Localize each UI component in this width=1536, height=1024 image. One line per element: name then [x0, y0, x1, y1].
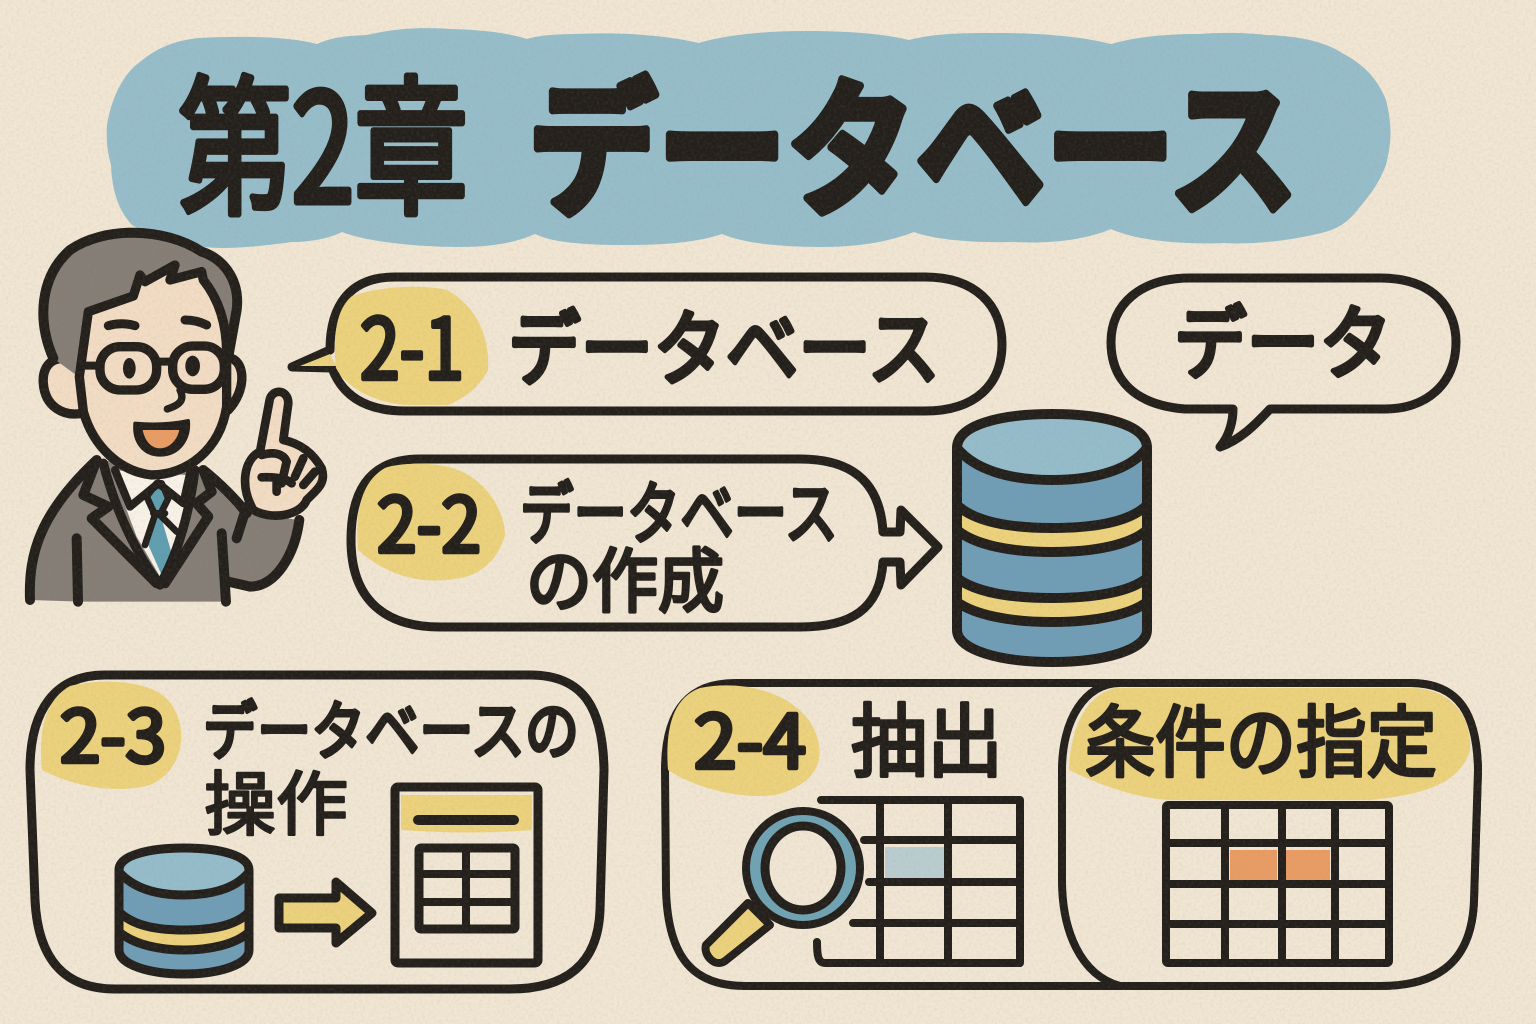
- title banner: [107, 28, 1391, 248]
- badge 2-2: [357, 464, 505, 581]
- arrow: [279, 882, 372, 943]
- mouth: [135, 421, 188, 455]
- label 2-2 text line 1: データベース: [520, 459, 838, 558]
- title: chapter number: 第2章: [178, 29, 468, 246]
- badge 2-1: [335, 287, 488, 405]
- section 2-2 bubble with arrow: [351, 459, 938, 627]
- ears: [43, 357, 242, 414]
- label 2-4 number: 2-4: [694, 683, 806, 790]
- badge 2-4: [667, 685, 820, 796]
- shirt and tie: [103, 463, 195, 585]
- jacket outlines and lapels: [30, 460, 299, 602]
- title: database: データベース: [528, 31, 1298, 246]
- icon: data table: [817, 800, 1020, 963]
- label 2-1 number: 2-1: [360, 283, 464, 404]
- label 2-1 text: データベース: [508, 283, 940, 402]
- character: presenter pointing up: [30, 233, 323, 602]
- speech bubble: data: [1111, 278, 1456, 447]
- jacket: [30, 460, 299, 602]
- nose: [167, 390, 182, 409]
- icon: table with highlighted cells: [1166, 805, 1389, 963]
- label: extraction: 抽出: [851, 678, 1003, 794]
- label 2-2 text line 2: の作成: [526, 526, 724, 627]
- label: condition: 条件の指定: [1085, 681, 1437, 793]
- brows: [108, 320, 207, 326]
- eyes: [123, 356, 200, 379]
- label 2-3 number: 2-3: [60, 678, 166, 783]
- label 2-2 number: 2-2: [377, 464, 481, 574]
- bubble text: データ: [1174, 280, 1392, 396]
- icon: document with table: [395, 787, 538, 963]
- label 2-3 text line 1: データベースの: [203, 681, 579, 773]
- hair outline: [43, 233, 237, 358]
- icon: magnifying glass: [706, 811, 860, 963]
- highlight header: [1069, 688, 1470, 800]
- label 2-3 text line 2: 操作: [204, 749, 348, 850]
- badge 2-3: [41, 682, 181, 789]
- panel: condition specification: [1062, 681, 1478, 986]
- glasses: [83, 346, 224, 390]
- icon: large database cylinder: [957, 414, 1147, 662]
- hand with raised finger: [245, 392, 323, 516]
- section 2-1 bubble: [292, 277, 1002, 411]
- face: [79, 265, 227, 475]
- icon: small database: [119, 848, 249, 974]
- panel 2-4: extraction: [665, 678, 1478, 986]
- hair: [43, 233, 237, 377]
- panel 2-3: operating the database: [30, 675, 604, 989]
